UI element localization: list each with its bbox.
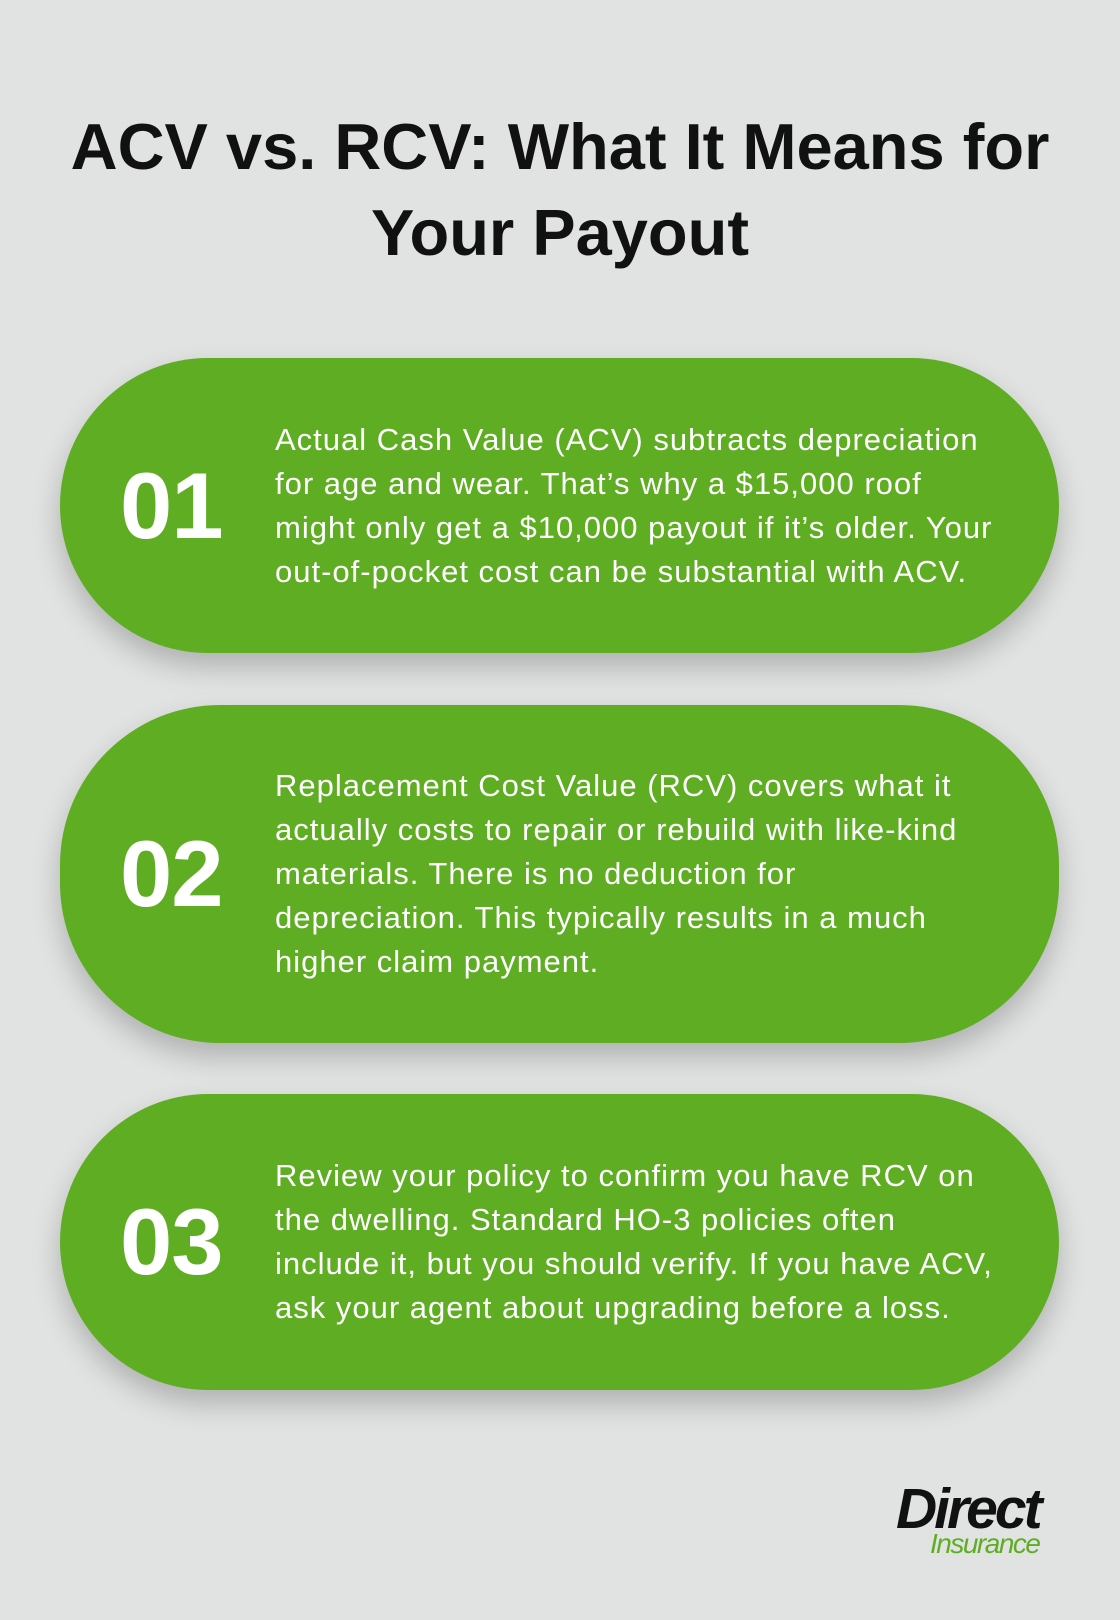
logo: Direct Insurance: Insurance (930, 1528, 1039, 1559)
text: RCV description: depreciation. This typically results in a much (275, 900, 927, 935)
text: RCV description (275, 768, 957, 979)
text: ACV description: out-of-pocket cost can be substantial with ACV. (275, 554, 967, 588)
title: ACV vs. RCV: What It Means for (71, 110, 1049, 183)
text: ACV description: might only get a $10,000 payout if it’s older. Your (275, 510, 992, 544)
text: RCV description: Replacement Cost Value (RCV) covers what it (275, 768, 951, 803)
text: RCV description: higher claim payment. (275, 944, 599, 979)
text: RCV description: materials. There is no deduction for (275, 856, 796, 891)
panel: 03 review (60, 1094, 1059, 1390)
text: RCV description: actually costs to repair or rebuild with like-kind (275, 812, 957, 847)
logo: Direct Insurance: Direct (896, 1477, 1040, 1541)
text: ACV description: for age and wear. That’s why a $15,000 roof (275, 466, 922, 500)
panel: 01 ACV (60, 358, 1059, 653)
text: review policy: Review your policy to confirm you have RCV on (275, 1158, 975, 1193)
text: review policy (275, 1158, 993, 1325)
number 03: 03 (120, 1189, 223, 1294)
number 01: 01 (120, 452, 223, 558)
text: review policy: include it, but you should verify. If you have ACV, (275, 1246, 993, 1281)
panel: 02 RCV (60, 705, 1059, 1043)
text: ACV description (275, 422, 992, 588)
text: review policy: the dwelling. Standard HO-3 policies often (275, 1202, 896, 1237)
text: ACV description: Actual Cash Value (ACV) subtracts depreciation (275, 422, 979, 456)
title (71, 110, 1049, 269)
number 02: 02 (120, 821, 223, 926)
text: review policy: ask your agent about upgrading before a loss. (275, 1290, 951, 1325)
title: Your Payout (371, 196, 749, 269)
